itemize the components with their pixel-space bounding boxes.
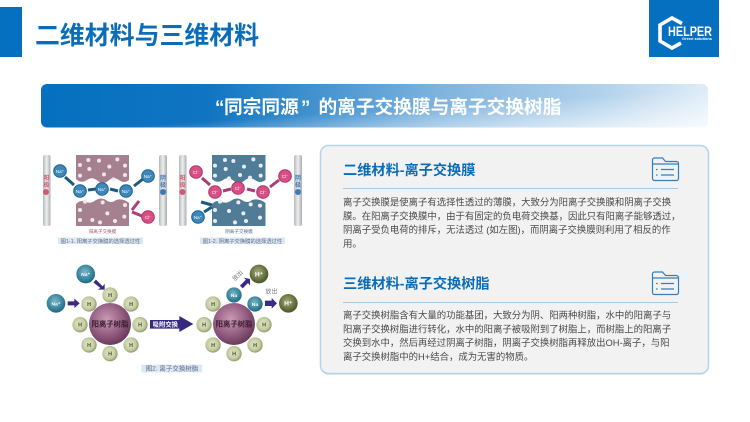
body text (343, 196, 681, 249)
header accent block (0, 7, 22, 57)
heading: 三维材料-离子交换树脂 (343, 276, 490, 292)
section: 2D material (343, 158, 681, 249)
diagram: ion exchange resin (47, 265, 298, 373)
electrode: anode: 极 (179, 181, 186, 189)
right H groups: H (262, 323, 266, 329)
caption: 图1-2. 阴离子交换膜的选择透过性 (203, 237, 283, 245)
caption: 图1-1. 阳离子交换膜的选择透过性 (61, 237, 141, 245)
banner heading: ” (301, 96, 310, 118)
electrode: cathode (159, 155, 167, 226)
icon: folder list (652, 272, 679, 294)
ions: Cl⁻ (145, 215, 152, 220)
right H groups: H (202, 323, 206, 329)
ions: Na⁺ (194, 215, 203, 220)
body text: 用。 (343, 238, 362, 249)
icon: folder list (652, 158, 679, 180)
released H+ ions: 放出 (231, 269, 245, 283)
ions: Na⁺ (144, 174, 153, 179)
panel: text card (320, 146, 708, 374)
title: 二维材料与三维材料 (35, 22, 259, 50)
body text: 阴离子受负电荷的排斥，无法透过 (如左图)，而阴离子交换膜则利用了相反的作 (343, 224, 671, 235)
left resin ball (89, 303, 131, 345)
body text: 膜。在阳离子交换膜中，由于有固定的负电荷交换基，因此只有阳离子能够透过， (343, 210, 681, 221)
heading: 二维材料-离子交换膜 (343, 162, 475, 179)
section: 3D material (343, 272, 679, 362)
ions: Cl⁻ (260, 190, 267, 195)
electrode: cathode: 极 (160, 181, 166, 189)
electrode: cathode (294, 155, 302, 226)
left H groups: H (129, 302, 133, 308)
electrode: anode: 阳 (179, 174, 186, 182)
ions: Cl⁻ (235, 186, 242, 191)
right resin ball (213, 303, 255, 345)
left H groups: H (78, 323, 82, 329)
released H+ ions: H⁺ (255, 271, 264, 278)
right H groups: H (232, 352, 236, 358)
membrane label: 阴离子交换膜 (225, 228, 253, 235)
released H+ ions: 放出 (265, 288, 277, 296)
arrows (65, 177, 143, 216)
electrode: cathode: 极 (295, 181, 301, 189)
right H groups: H (253, 343, 257, 349)
membrane label: 阳离子交换膜 (89, 228, 117, 235)
right H groups: H (211, 302, 215, 308)
electrode: cathode: 阴 (295, 174, 301, 182)
electrode: anode: 极 (43, 181, 50, 189)
body text (343, 310, 671, 362)
electrode: anode: 阳 (43, 174, 50, 182)
logo: HELPER: Green solutions (682, 37, 712, 41)
ions: Na⁺ (122, 189, 131, 194)
left H groups: H (108, 293, 112, 299)
incoming Na ions: Na⁺ (51, 301, 61, 307)
ions: Na⁺ (76, 189, 85, 194)
ions: Na⁺ (56, 169, 65, 174)
bound Na groups (226, 287, 263, 312)
banner heading: 的离子交换膜与离子交换树脂 (318, 96, 562, 118)
left resin ball: 阳离子树脂 (92, 320, 129, 329)
banner heading: 同宗同源 (224, 96, 299, 118)
released H+ ions: H⁺ (284, 301, 293, 308)
ions (190, 166, 291, 223)
right resin ball: 阳离子树脂 (216, 320, 253, 329)
incoming Na ions (47, 265, 105, 313)
electrode: anode (43, 155, 50, 226)
left H groups: H (138, 323, 142, 329)
arrows (201, 178, 279, 212)
membrane (76, 155, 129, 226)
logo: HELPER (649, 0, 719, 57)
diagram: cation exchange membrane (43, 155, 167, 245)
body text: 离子交换树脂含有大量的功能基团，大致分为阴、阳两种树脂，水中的阳离子与 (343, 310, 671, 320)
exchange arrow: 吸附交换 (153, 319, 179, 328)
ions: Cl⁻ (282, 174, 289, 179)
incoming Na ions: Na⁺ (81, 272, 91, 278)
ions (54, 165, 154, 223)
body text: 离子交换膜是使离子有选择性透过的薄膜，大致分为阳离子交换膜和阴离子交换 (343, 196, 672, 208)
caption (141, 364, 202, 373)
left H groups: H (108, 352, 112, 358)
electrode: anode (179, 155, 186, 226)
logo: HELPER: HELPER (668, 24, 712, 39)
left H groups: H (129, 343, 133, 349)
diagram: anion exchange membrane (179, 155, 302, 245)
exchange arrow (150, 316, 193, 332)
left H groups: H (87, 343, 91, 349)
right H groups: H (211, 343, 215, 349)
membrane charges (78, 157, 127, 224)
membrane (212, 155, 266, 226)
bound Na groups: Na (252, 302, 258, 308)
ions: Cl⁻ (212, 190, 219, 195)
electrode: cathode: 阴 (160, 174, 166, 182)
caption: 图2. 离子交换树脂 (146, 364, 199, 373)
bound Na groups: Na (231, 293, 237, 299)
left H groups: H (87, 302, 91, 308)
body text: 离子交换树脂中的H+结合，成为无害的物质。 (343, 351, 533, 362)
right H groups (196, 296, 272, 361)
body text: 阳离子交换树脂进行转化，水中的阳离子被吸附到了树脂上，而树脂上的阳离子 (343, 323, 671, 334)
banner (41, 84, 708, 128)
body text: 交换到水中，然后再经过阴离子树脂，阴离子交换树脂再释放出OH-离子，与阳 (343, 337, 670, 348)
released H+ ions (231, 265, 298, 313)
banner heading: “ (215, 96, 224, 118)
membrane charges (213, 157, 263, 224)
ions: Na⁺ (98, 187, 107, 192)
left H groups (72, 287, 148, 361)
ions: Cl⁻ (193, 170, 200, 175)
